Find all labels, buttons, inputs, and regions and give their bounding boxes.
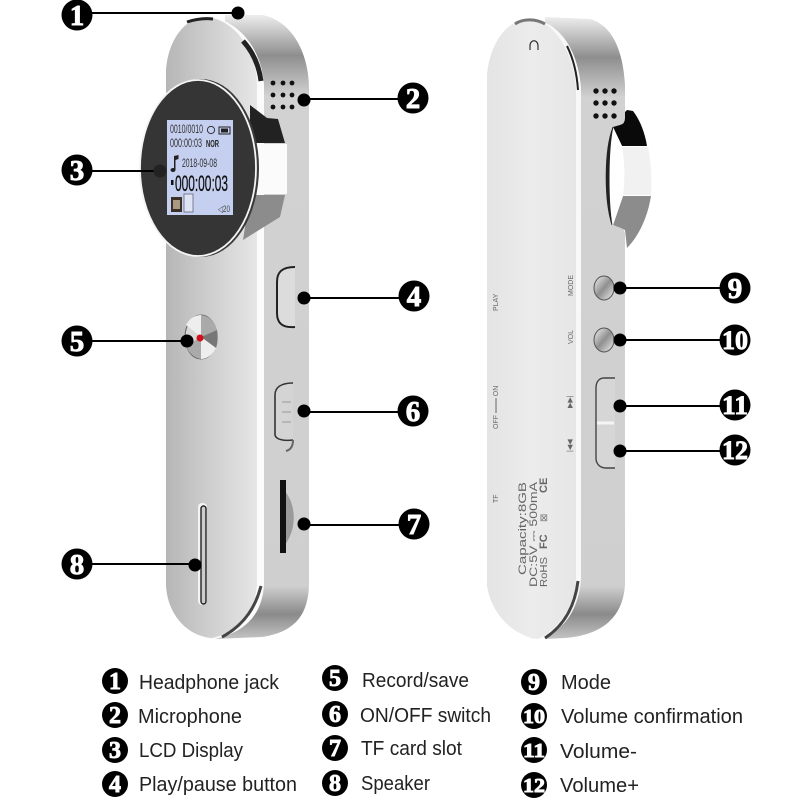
printed labels: DC:5V ⎓ 500mA	[528, 481, 540, 587]
legend item 7	[322, 735, 462, 762]
callout 8	[62, 548, 202, 581]
white edge strip	[205, 15, 264, 639]
legend item 4	[102, 771, 297, 798]
ring seen from side	[606, 110, 651, 248]
legend item 3	[102, 737, 243, 764]
legend item 8	[322, 770, 430, 797]
legend item 12: Volume+	[560, 775, 639, 797]
LCD display: 000:00:03	[175, 171, 228, 196]
callout 6: 6	[406, 396, 420, 428]
mode button	[594, 276, 614, 300]
callout 4	[298, 280, 430, 313]
volume confirmation button	[594, 328, 614, 352]
LCD display: ◁20	[218, 204, 230, 214]
callout 10	[614, 324, 750, 356]
printed labels: RoHS	[539, 557, 550, 587]
legend item 6: 6	[329, 702, 341, 728]
printed labels: Capacity:8GB	[517, 482, 529, 575]
legend item 12	[521, 772, 639, 798]
ring mount behind screen	[243, 105, 287, 240]
printed labels: CE	[538, 478, 550, 493]
legend item 3: 3	[109, 738, 121, 764]
callout 5: 5	[70, 326, 84, 358]
callout 1: 1	[70, 0, 84, 32]
callout 2: 2	[406, 83, 420, 115]
printed labels: ⊠	[539, 514, 550, 522]
on/off switch	[275, 383, 293, 451]
device: back view	[487, 17, 651, 639]
side face	[545, 17, 625, 639]
play/pause button	[277, 267, 295, 327]
callout 8: 8	[70, 549, 84, 581]
legend item 6: ON/OFF switch	[360, 705, 491, 727]
legend item 7: 7	[329, 736, 341, 762]
printed labels: TF	[493, 494, 500, 503]
legend item 2: Microphone	[138, 706, 242, 728]
callout 12: 12	[722, 436, 748, 465]
hole edge shadow	[606, 127, 613, 225]
front face	[166, 17, 257, 638]
callout 9: 9	[728, 273, 742, 305]
printed labels	[493, 275, 575, 587]
screen bezel	[140, 80, 256, 256]
legend item 4: Play/pause button	[139, 774, 297, 796]
microphone holes	[593, 88, 617, 119]
legend item 5	[322, 665, 469, 692]
callout 3	[62, 154, 166, 187]
device: front view	[140, 15, 309, 639]
legend item 5: Record/save	[362, 670, 469, 692]
LCD display	[167, 120, 233, 215]
legend item 11	[521, 737, 637, 763]
legend item 2: 2	[109, 703, 121, 729]
callout 7: 7	[407, 509, 421, 541]
legend item 6	[322, 701, 491, 728]
speaker slot	[198, 503, 207, 605]
legend item 8: Speaker	[361, 773, 430, 795]
LCD display: 0010/0010	[170, 122, 203, 136]
printed labels: MODE	[568, 275, 575, 296]
legend	[102, 665, 743, 798]
LCD display: 2018-09-08	[182, 156, 217, 170]
callout 12	[614, 434, 750, 466]
white edge strip	[530, 18, 581, 639]
dark edge highlights	[187, 19, 261, 637]
printed labels: |◀◀	[567, 439, 574, 452]
back face	[487, 19, 576, 639]
printed labels: FC	[538, 534, 550, 549]
legend item 10: Volume confirmation	[561, 706, 743, 728]
callout 6	[298, 396, 428, 428]
side face	[215, 15, 309, 639]
LCD display: 000:00:03	[170, 136, 202, 150]
LCD display: NOR	[206, 139, 219, 150]
screen back rim	[143, 79, 259, 257]
printed labels: OFF ═══ ON	[493, 386, 500, 429]
legend item 11: 11	[523, 740, 545, 762]
callout 3: 3	[70, 155, 84, 187]
legend item 4: 4	[109, 772, 121, 798]
callout 9	[614, 272, 750, 305]
printed labels: VOL	[568, 330, 575, 344]
callout 11: 11	[722, 391, 748, 420]
legend item 9: Mode	[561, 672, 611, 694]
callout 2	[298, 82, 428, 115]
legend item 10	[521, 703, 743, 729]
legend item 3: LCD Display	[139, 740, 243, 762]
callout 4: 4	[407, 281, 421, 313]
legend item 9	[521, 669, 611, 696]
callout 1	[62, 0, 244, 32]
legend item 12: 12	[523, 775, 545, 797]
record button	[185, 315, 218, 359]
printed labels: ▶▶|	[567, 395, 574, 408]
callout 11	[614, 390, 750, 420]
legend item 1	[102, 668, 280, 695]
legend item 5: 5	[329, 666, 341, 692]
microphone holes	[271, 81, 294, 109]
legend item 8: 8	[329, 771, 341, 797]
legend item 9: 9	[528, 670, 540, 696]
TF card slot	[280, 480, 294, 553]
headphone icon	[530, 41, 538, 50]
volume rocker	[596, 378, 615, 468]
callout 5	[62, 326, 194, 358]
callout 7	[298, 508, 430, 541]
printed labels: PLAY	[493, 293, 500, 311]
dark edge highlights	[515, 20, 578, 638]
legend item 1: 1	[109, 669, 121, 695]
legend item 2	[102, 702, 242, 729]
legend item 7: TF card slot	[361, 738, 462, 760]
legend item 10: 10	[523, 706, 545, 728]
callout 10: 10	[722, 326, 748, 355]
legend item 1: Headphone jack	[139, 672, 280, 694]
legend item 11: Volume-	[560, 741, 637, 763]
